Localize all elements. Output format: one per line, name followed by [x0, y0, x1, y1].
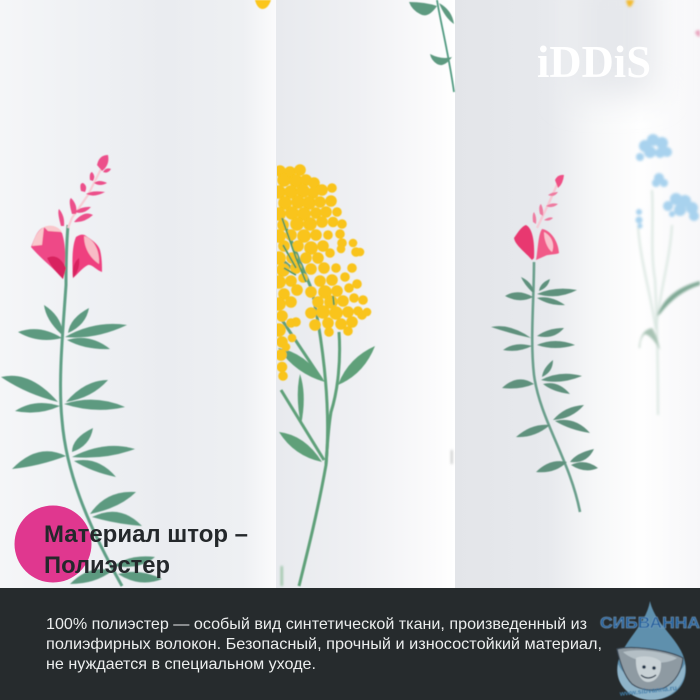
- centre yellow mimosa plant: [273, 165, 375, 586]
- top yellow bud: [255, 0, 271, 9]
- stems and leaves: [280, 218, 340, 586]
- stem: [532, 262, 580, 512]
- green sprigs over blossoms: [282, 218, 334, 305]
- pink blossoms: [514, 225, 534, 260]
- water drop: [617, 601, 686, 700]
- left pink flower plant: [1, 155, 162, 586]
- brand name: СИБВАННА: [600, 615, 700, 632]
- yellow blossom cluster: [273, 165, 370, 380]
- top hanging sprig: [409, 0, 454, 92]
- iddis logo: iDDiS: [537, 37, 651, 87]
- pink circle accent: [14, 506, 92, 582]
- description text: полиэфирных волокон. Безопасный, прочный и износостойкий материал,: [46, 636, 602, 653]
- stem: [61, 225, 122, 586]
- leaves: [657, 281, 700, 316]
- right blue forget-me-not plant: [626, 0, 700, 415]
- sibvanna watermark logo: [600, 601, 700, 700]
- flower spike: [537, 178, 560, 228]
- flower spike: [68, 165, 103, 228]
- leaves: [1, 305, 162, 584]
- stems: [638, 190, 672, 415]
- blue blossoms: [636, 134, 699, 228]
- description text: 100% полиэстер — особый вид синтетической ткани, произведенный из: [46, 616, 587, 633]
- title: Полиэстер: [44, 552, 170, 579]
- leaves: [491, 277, 598, 472]
- pink blossoms: [31, 227, 65, 279]
- bathtub: [617, 648, 683, 690]
- title: Материал штор –: [44, 521, 248, 548]
- website: www.sibvanna.ru: [618, 685, 677, 698]
- right pink flower plant: [491, 175, 598, 512]
- dark text panel: [0, 588, 700, 700]
- faint fold shadows: [281, 450, 452, 586]
- description text: не нуждается в специальном уходе.: [46, 656, 316, 673]
